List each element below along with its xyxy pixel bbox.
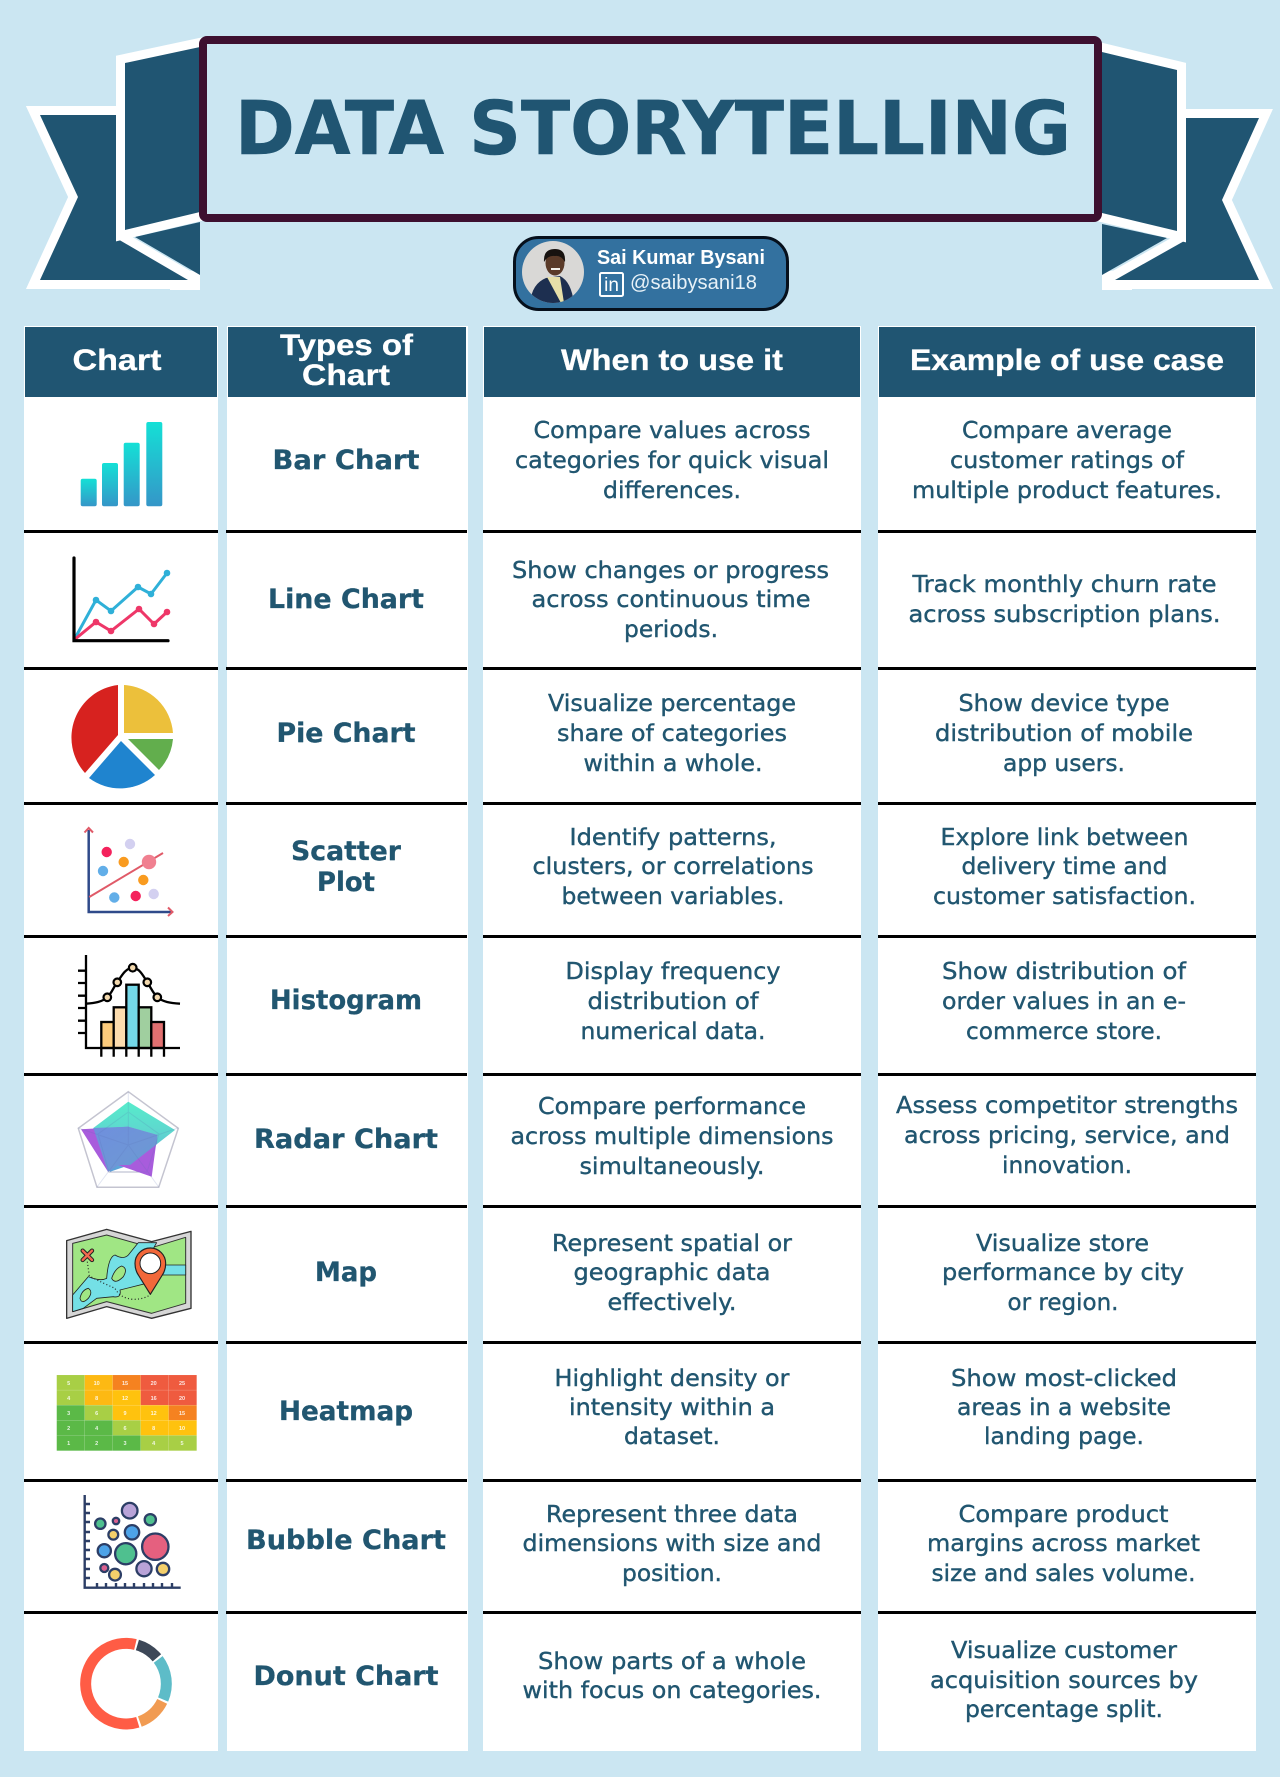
example use case: distribution of mobile (935, 719, 1193, 747)
when to use: simultaneously. (580, 1152, 764, 1180)
header: example of use case: Example of use case (910, 344, 1224, 377)
left ribbon band (125, 47, 200, 230)
icon: heatmap: 4 (95, 1426, 99, 1432)
left ribbon tail (40, 115, 225, 300)
when to use (532, 823, 814, 910)
row: histogram (78, 955, 1187, 1057)
row: radar chart (78, 1091, 1238, 1187)
when to use: Compare performance (538, 1092, 806, 1120)
icon: heatmap: 4 (67, 1396, 71, 1402)
icon: heatmap: 5 (67, 1381, 70, 1387)
icon: heatmap: 9 (123, 1411, 127, 1417)
when to use (548, 689, 796, 777)
chart name: Line Chart (268, 584, 424, 615)
example use case: delivery time and (962, 852, 1168, 880)
when to use (566, 957, 781, 1045)
icon: histogram (78, 955, 180, 1057)
chart name: Plot (317, 867, 375, 898)
example use case (942, 957, 1187, 1045)
icon: heatmap: 10 (94, 1381, 100, 1387)
row: scatter plot (84, 823, 1196, 916)
icon: line chart (74, 558, 170, 641)
table header row (25, 327, 1255, 397)
when to use: differences. (603, 476, 741, 504)
icon: heatmap: 20 (179, 1396, 185, 1402)
example use case: across subscription plans. (908, 600, 1220, 628)
when to use: Show parts of a whole (538, 1647, 806, 1675)
chart name: Histogram (270, 985, 422, 1016)
icon: heatmap: 12 (151, 1411, 157, 1417)
example use case (933, 823, 1196, 910)
icon: heatmap: 6 (95, 1411, 98, 1417)
chart name: Map (315, 1257, 377, 1288)
example use case (951, 1364, 1177, 1450)
when to use: Display frequency (566, 957, 781, 985)
when to use: across multiple dimensions (510, 1122, 834, 1150)
example use case (896, 1091, 1238, 1179)
header: example of use case (879, 327, 1255, 397)
example use case: customer satisfaction. (933, 882, 1196, 910)
example use case: multiple product features. (912, 476, 1222, 504)
when to use: Highlight density or (554, 1364, 790, 1392)
icon: heatmap: 8 (152, 1426, 155, 1432)
example use case: customer ratings of (950, 446, 1185, 474)
icon: linkedin (600, 273, 623, 296)
right ribbon tail (1078, 118, 1259, 300)
icon: author portrait (522, 241, 584, 305)
when to use: numerical data. (580, 1017, 766, 1045)
icon: heatmap: 6 (123, 1426, 127, 1432)
example use case (942, 1229, 1184, 1316)
icon: linkedin: in (604, 275, 619, 296)
example use case: Show device type (958, 689, 1170, 717)
example use case: Compare average (962, 416, 1172, 444)
icon: heatmap: 2 (95, 1441, 98, 1447)
when to use: geographic data (574, 1258, 770, 1286)
header: chart (25, 327, 217, 397)
right ribbon band (1102, 52, 1177, 231)
example use case: Visualize customer (951, 1636, 1177, 1664)
row: bar chart (81, 416, 1222, 506)
when to use: Identify patterns, (570, 823, 776, 851)
icon: heatmap: 1 (67, 1441, 70, 1447)
icon: radar chart (78, 1092, 178, 1187)
when to use: Represent spatial or (552, 1229, 792, 1257)
when to use: position. (622, 1559, 722, 1587)
example use case: Show distribution of (942, 957, 1187, 985)
example use case: order values in an e- (942, 987, 1186, 1015)
row: donut chart (86, 1636, 1198, 1724)
example use case (927, 1500, 1200, 1587)
when to use: distribution of (588, 987, 759, 1015)
when to use: categories for quick visual (515, 446, 829, 474)
example use case (935, 689, 1193, 777)
example use case: margins across market (927, 1529, 1200, 1557)
chart name: Bar Chart (272, 445, 420, 476)
icon: heatmap: 20 (151, 1381, 157, 1387)
example use case: areas in a website (957, 1393, 1171, 1421)
example use case: or region. (1008, 1288, 1118, 1316)
when to use: Compare values across (534, 416, 810, 444)
when to use: within a whole. (584, 749, 762, 777)
example use case: percentage split. (965, 1695, 1163, 1723)
when to use: clusters, or correlations (532, 852, 814, 880)
example use case: Explore link between (940, 823, 1188, 851)
when to use: dimensions with size and (522, 1529, 822, 1557)
when to use (522, 1500, 822, 1587)
when to use: effectively. (608, 1288, 736, 1316)
when to use (510, 1092, 834, 1180)
linkedin handle: @saibysani18 (630, 272, 757, 294)
icon: heatmap: 5 (180, 1441, 184, 1447)
example use case (908, 570, 1220, 628)
when to use: Visualize percentage (548, 689, 796, 717)
example use case: performance by city (942, 1258, 1184, 1286)
icon: heatmap: 15 (122, 1381, 128, 1387)
chart name (291, 836, 401, 898)
icon: heatmap: 3 (67, 1411, 70, 1417)
icon: bubble chart (85, 1495, 181, 1588)
icon: heatmap (57, 1375, 197, 1451)
banner ribbon (40, 47, 1259, 300)
when to use (552, 1229, 792, 1316)
when to use: Show changes or progress (512, 556, 829, 584)
row: line chart (74, 556, 1220, 643)
header: when to use it (484, 327, 860, 397)
row: map (67, 1229, 1184, 1318)
example use case: Assess competitor strengths (896, 1091, 1238, 1119)
example use case: size and sales volume. (932, 1559, 1196, 1587)
example use case: commerce store. (966, 1017, 1162, 1045)
when to use: Represent three data (546, 1500, 798, 1528)
when to use: with focus on categories. (522, 1676, 822, 1704)
example use case (930, 1636, 1198, 1723)
icon: heatmap: 16 (151, 1396, 157, 1402)
header: types of chart (228, 327, 466, 397)
when to use (515, 416, 829, 504)
header: types of chart: Types of (280, 329, 414, 362)
chart name: Bubble Chart (246, 1525, 446, 1556)
title: DATA STORYTELLING (235, 86, 1071, 172)
chart name: Donut Chart (254, 1661, 439, 1692)
author name: Sai Kumar Bysani (597, 247, 765, 269)
icon: heatmap: 3 (123, 1441, 127, 1447)
example use case: Track monthly churn rate (911, 570, 1216, 598)
icon: heatmap: 15 (179, 1411, 185, 1417)
when to use: periods. (624, 615, 718, 643)
table column backgrounds (24, 326, 1256, 1751)
icon: bar chart (81, 422, 162, 506)
icon: pie chart (71, 685, 173, 788)
chart name: Radar Chart (254, 1124, 438, 1155)
icon: heatmap: 4 (152, 1441, 156, 1447)
example use case: Visualize store (976, 1229, 1149, 1257)
example use case: across pricing, service, and (904, 1121, 1230, 1149)
icon: donut chart (86, 1643, 166, 1724)
row: heatmap (57, 1364, 1177, 1451)
when to use (522, 1647, 822, 1704)
row: bubble chart (85, 1495, 1200, 1588)
icon: scatter plot (84, 828, 172, 916)
when to use: across continuous time (532, 585, 810, 613)
example use case: acquisition sources by (930, 1666, 1198, 1694)
when to use (554, 1364, 790, 1450)
icon: heatmap: 2 (67, 1426, 70, 1432)
icon: heatmap: 25 (179, 1381, 185, 1387)
example use case (912, 416, 1222, 504)
chart name: Scatter (291, 836, 401, 867)
chart name: Pie Chart (276, 718, 416, 749)
example use case: Show most-clicked (951, 1364, 1177, 1392)
example use case: innovation. (1002, 1151, 1132, 1179)
icon: map (67, 1229, 191, 1318)
title frame (203, 40, 1098, 218)
when to use: between variables. (562, 882, 784, 910)
header: chart: Chart (72, 344, 162, 377)
icon: heatmap: 8 (95, 1396, 98, 1402)
example use case: app users. (1003, 749, 1125, 777)
when to use: dataset. (624, 1422, 720, 1450)
icon: heatmap: 12 (122, 1396, 128, 1402)
author badge (514, 238, 788, 310)
icon: heatmap: 10 (179, 1426, 185, 1432)
header: types of chart: Chart (302, 359, 390, 392)
when to use (512, 556, 829, 643)
chart name: Heatmap (279, 1396, 413, 1427)
when to use: share of categories (557, 719, 787, 747)
row: pie chart (71, 685, 1193, 788)
header: when to use it: When to use it (561, 344, 783, 377)
when to use: intensity within a (569, 1393, 775, 1421)
example use case: Compare product (958, 1500, 1168, 1528)
example use case: landing page. (984, 1422, 1144, 1450)
